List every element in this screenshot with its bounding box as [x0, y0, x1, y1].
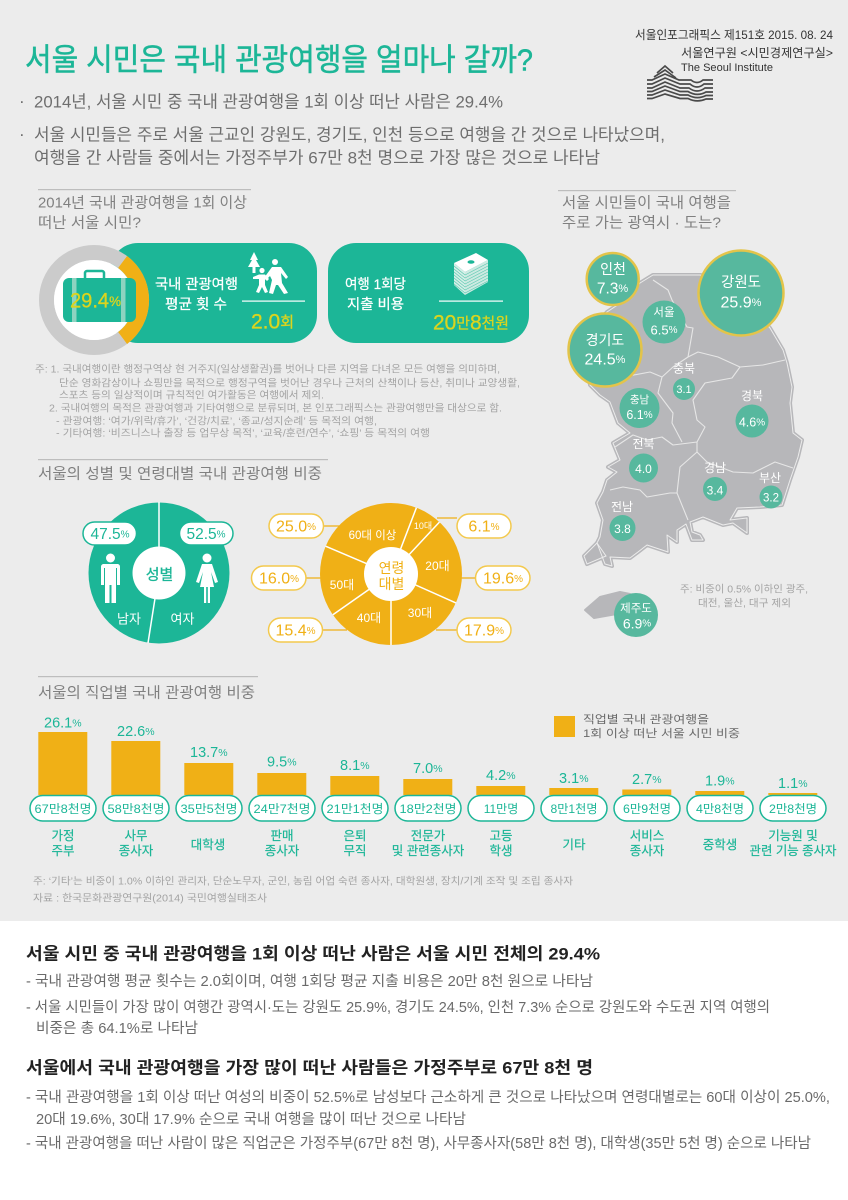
panel: average trips: 국내 관광여행	[155, 276, 238, 292]
callout: 20s share	[476, 566, 530, 590]
bar: middle school students	[687, 774, 753, 852]
conclusion two: 서울에서 국내 관광여행을 가장 많이 떠난 사람들은 가정주부로 67만 8천 명	[26, 1059, 593, 1078]
bar: middle school students: 중학생	[703, 838, 737, 852]
region: Gyeonggi	[568, 314, 642, 386]
region: Gyeongbuk: 4.6%	[739, 416, 765, 430]
chart: age pie: 60대 이상	[349, 529, 397, 542]
chart: gender pie	[83, 502, 233, 644]
icon: suitcase	[63, 271, 136, 322]
region: Gangwon: 강원도	[721, 274, 761, 291]
callout: 40s share: 15.4%	[275, 623, 316, 640]
title: 서울 시민은 국내 관광여행을 얼마나 갈까?	[25, 43, 533, 78]
bar: middle school students: 1.9%	[705, 774, 735, 790]
conclusion one: - 국내 관광여행 평균 횟수는 2.0회이며, 여행 1회당 평균 지출 비용은 20만 8천 원으로 나타남	[26, 973, 593, 990]
map note	[680, 583, 808, 610]
bar: office workers: 58만8천명	[108, 801, 164, 816]
bar: service workers: 서비스	[630, 829, 664, 843]
bar: professionals: 전문가	[411, 829, 446, 843]
bar: college students	[176, 745, 242, 852]
bar chart: occupation	[30, 716, 837, 858]
bar: skilled workers: 1.1%	[778, 776, 808, 792]
region: Chungnam: 충남	[630, 394, 649, 406]
callout: male share: 47.5%	[90, 526, 130, 543]
footnotes: - 기타여행: ‘비즈니스나 출장 등 업무상 목적’, ‘교육/훈련/연수’, ‘쇼핑’ 등 목적의 여행	[56, 427, 430, 440]
bar: professionals: 및 관련종사자	[392, 844, 465, 858]
chart: age pie: 연령	[379, 560, 404, 576]
panel: average trips: 2.0회	[251, 311, 294, 334]
region: Gyeongbuk	[736, 389, 768, 438]
bar: college students: 대학생	[191, 838, 225, 852]
bar: office workers: 사무	[124, 829, 148, 843]
conclusion one: - 서울 시민들이 가장 많이 여행간 광역시·도는 강원도 25.9%, 경기도 24.5%, 인천 7.3% 순으로 강원도와 수도권 지역 여행의	[26, 999, 770, 1016]
callout: 50s share	[252, 566, 306, 590]
panel: conclusions	[0, 921, 848, 1200]
legend	[554, 713, 740, 740]
region: Gyeonggi: 24.5%	[585, 352, 626, 369]
bar: retired	[322, 758, 388, 858]
panel: spend per trip	[328, 243, 529, 343]
icon: man	[101, 554, 120, 603]
bar: retired: 무직	[343, 844, 367, 858]
conclusion one: 서울 시민 중 국내 관광여행을 1회 이상 떠난 사람은 서울 시민 전체의 29.4%	[26, 945, 600, 964]
bar: skilled workers: 2만8천명	[769, 801, 817, 816]
heading: 2014 travellers: 2014년 국내 관광여행을 1회 이상	[38, 195, 247, 212]
bar: housewives	[30, 716, 96, 858]
heading: gender and age: 서울의 성별 및 연령대별 국내 관광여행 비중	[38, 466, 322, 483]
panel: spend per trip: 여행 1회당	[345, 276, 406, 292]
bar: office workers: 종사자	[119, 844, 154, 858]
bar: service workers: 6만9천명	[623, 801, 671, 816]
bar: sales workers: 종사자	[265, 844, 300, 858]
bar: professionals: 7.0%	[413, 761, 443, 777]
chart: age pie: 50대	[330, 578, 354, 592]
region: Busan	[759, 471, 782, 508]
bar: professionals	[392, 761, 465, 858]
bar: sales workers	[249, 755, 315, 858]
callout: 60s share	[269, 514, 324, 538]
chart: age pie: 대별	[379, 576, 404, 592]
footnotes: 2. 국내여행의 목적은 관광여행과 기타여행으로 분류되며, 본 인포그래픽스는 관광여행만을 대상으로 함.	[49, 403, 502, 415]
bar: retired: 21만1천명	[326, 801, 384, 816]
region: Jeonbuk: 4.0	[635, 462, 652, 476]
conclusion two	[26, 1059, 830, 1152]
region: Jeju	[614, 593, 658, 637]
region: Seoul	[642, 300, 686, 344]
chart notes and source	[33, 875, 573, 905]
bar: other: 3.1%	[559, 771, 589, 787]
bar: other: 기타	[562, 838, 586, 852]
footnotes: 스포츠 등의 일상적이며 규칙적인 여가활동은 여행에서 제외.	[59, 389, 324, 402]
bar: retired: 은퇴	[343, 829, 367, 843]
chart: age pie: 20대	[425, 559, 450, 573]
chart: gender pie: 남자	[117, 612, 141, 627]
summary bullets: ·	[19, 125, 25, 144]
summary bullets	[19, 92, 665, 168]
region: Gyeongnam: 경남	[704, 461, 726, 475]
region: Jeonnam: 3.8	[614, 522, 631, 536]
callout: 20s share: 19.6%	[483, 571, 523, 588]
heading: regions	[558, 190, 736, 232]
bar: high school students: 11만명	[484, 802, 518, 816]
callout: female share	[180, 522, 233, 545]
conclusion one	[26, 945, 770, 1037]
summary bullets: ·	[19, 92, 25, 111]
region: Incheon: 7.3%	[597, 281, 628, 298]
region: Seoul: 서울	[653, 306, 675, 319]
region: Jeju: 6.9%	[623, 616, 651, 632]
map: South Korea	[568, 250, 802, 637]
bar: high school students: 학생	[489, 844, 513, 858]
callout: 10s share	[457, 514, 511, 538]
bar: sales workers: 24만7천명	[254, 801, 310, 816]
callout: 30s share: 17.9%	[464, 623, 504, 640]
bar: skilled workers	[750, 776, 837, 858]
bar: office workers: 22.6%	[117, 724, 155, 740]
bar: retired: 8.1%	[340, 758, 370, 774]
bar: sales workers: 판매	[270, 829, 294, 843]
chart: age pie: 30대	[408, 606, 432, 620]
region: Jeonnam	[610, 500, 636, 541]
region: Jeonbuk: 전북	[632, 437, 655, 451]
bar: housewives: 주부	[51, 844, 75, 858]
legend: 1회 이상 떠난 서울 시민 비중	[583, 727, 740, 740]
bar: skilled workers: 기능원 및	[768, 829, 818, 843]
callout: 40s share	[268, 618, 322, 642]
publication info: 서울인포그래픽스 제151호 2015. 08. 24	[635, 28, 833, 42]
region: Busan: 부산	[759, 471, 781, 485]
region: Incheon: 인천	[600, 261, 626, 277]
footnotes	[35, 363, 520, 440]
region: Chungnam	[620, 388, 660, 428]
bar: high school students: 고등	[489, 829, 513, 843]
heading: occupation: 서울의 직업별 국내 관광여행 비중	[38, 685, 255, 702]
bar: college students: 35만5천명	[180, 801, 238, 816]
conclusion two: - 국내 관광여행을 1회 이상 떠난 여성의 비중이 52.5%로 남성보다 근소하게 큰 것으로 나타났으며 연령대별로는 60대 이상이 25.0%,	[26, 1089, 830, 1106]
legend: 직업별 국내 관광여행을	[583, 713, 709, 726]
chart: 29.4% donut with suitcase	[46, 252, 142, 348]
chart notes and source: 주: ‘기타’는 비중이 1.0% 이하인 관리자, 단순노무자, 군인, 농림 어업 숙련 종사자, 대학원생, 장치/기계 조작 및 조립 종사자	[33, 875, 573, 888]
map note: 대전, 울산, 대구 제외	[698, 598, 791, 610]
chart: age pie: 40대	[357, 611, 381, 625]
chart: age pie: 10대	[414, 521, 432, 531]
heading: regions: 서울 시민들이 국내 여행을	[562, 195, 731, 212]
region: Jeonnam: 전남	[611, 500, 633, 514]
heading: 2014 travellers	[38, 189, 251, 232]
region: Incheon	[587, 253, 639, 305]
summary bullets: 2014년, 서울 시민 중 국내 관광여행을 1회 이상 떠난 사람은 29.4%	[34, 93, 503, 112]
publication info: 서울연구원 <시민경제연구실>	[681, 46, 833, 60]
map note: 주: 비중이 0.5% 이하인 광주,	[680, 583, 808, 596]
callout: 50s share: 16.0%	[259, 571, 299, 588]
panel: spend per trip: 지출 비용	[347, 296, 404, 312]
panel: average trips: 평균 횟 수	[165, 296, 227, 312]
bar: other: 8만1천명	[550, 801, 598, 816]
bar: office workers	[103, 724, 169, 858]
region: Gyeonggi: 경기도	[586, 332, 624, 348]
bar: housewives: 가정	[51, 829, 75, 843]
heading: regions: 주로 가는 광역시 · 도는?	[562, 215, 721, 232]
bar: middle school students: 4만8천명	[696, 801, 744, 816]
bar: skilled workers: 관련 기능 종사자	[750, 844, 837, 858]
bar: service workers: 종사자	[630, 844, 665, 858]
region: Seoul: 6.5%	[651, 323, 678, 338]
publication info	[635, 28, 833, 74]
icon: stack of money	[454, 253, 488, 295]
conclusion one: 비중은 총 64.1%로 나타남	[36, 1020, 198, 1037]
bar: service workers: 2.7%	[632, 772, 662, 788]
summary bullets: 서울 시민들은 주로 서울 근교인 강원도, 경기도, 인천 등으로 여행을 간 것으로 나타났으며,	[34, 126, 665, 145]
region: Chungnam: 6.1%	[626, 408, 653, 422]
footnotes: 단순 영화감상이나 쇼핑만을 목적으로 행정구역을 벗어난 경우나 근처의 산책이나 등산, 취미나 교양생활,	[59, 377, 520, 390]
summary bullets: 여행을 간 사람들 중에서는 가정주부가 67만 8천 명으로 가장 많은 것으로 나타남	[34, 149, 600, 168]
region: Busan: 3.2	[763, 493, 779, 505]
icon: Seoul Institute logo	[647, 66, 713, 101]
chart: age pie	[252, 503, 530, 645]
bar: high school students	[468, 768, 534, 858]
bar: housewives: 67만8천명	[34, 801, 92, 816]
callout: female share: 52.5%	[186, 526, 226, 543]
conclusion two: 20대 19.6%, 30대 17.9% 순으로 국내 여행을 많이 떠난 것으로 나타남	[36, 1111, 466, 1128]
panel: spend per trip: 20만8천원	[433, 312, 509, 335]
bar: sales workers: 9.5%	[267, 755, 297, 771]
icon: woman	[196, 554, 218, 603]
icon: hikers and tree	[248, 252, 288, 294]
callout: male share	[83, 522, 136, 545]
region: Jeju: 제주도	[620, 602, 652, 615]
region: Gangwon: 25.9%	[721, 295, 762, 312]
region: Gyeongnam: 3.4	[707, 484, 724, 498]
chart: 29.4% donut with suitcase: 29.4%	[70, 290, 121, 313]
bar: housewives: 26.1%	[44, 716, 82, 732]
icon: Jeju island	[585, 592, 630, 618]
region: Chungbuk: 충북	[673, 362, 695, 376]
region: Gyeongbuk: 경북	[741, 389, 763, 403]
callout: 30s share	[457, 618, 511, 642]
chart: gender pie: 여자	[171, 612, 194, 627]
region: Gyeongnam	[703, 461, 727, 501]
callout: 60s share: 25.0%	[276, 519, 316, 536]
chart notes and source: 자료 : 한국문화관광연구원(2014) 국민여행실태조사	[33, 893, 267, 905]
footnotes: - 관광여행: ‘여가/위락/휴가’, ‘건강/치료’, ‘종교/성지순례’ 등 목적의 여행,	[56, 415, 377, 428]
region: Chungbuk	[673, 362, 695, 400]
bar: high school students: 4.2%	[486, 768, 516, 784]
chart: gender pie: 성별	[146, 567, 173, 584]
bar: service workers	[614, 772, 680, 858]
region: Jeonbuk	[629, 437, 658, 482]
region: Chungbuk: 3.1	[676, 384, 692, 396]
bar: professionals: 18만2천명	[400, 801, 456, 816]
region: Gangwon	[698, 250, 784, 336]
footnotes: 주: 1. 국내여행이란 행정구역상 현 거주지(일상생활권)를 벗어나 다른 지역을 다녀온 모든 여행을 의미하며,	[35, 363, 500, 376]
bar: college students: 13.7%	[190, 745, 228, 761]
conclusion two: - 국내 관광여행을 떠난 사람이 많은 직업군은 가정주부(67만 8천 명), 사무종사자(58만 8천 명), 대학생(35만 5천 명) 순으로 나타남	[26, 1135, 811, 1152]
bar: other	[541, 771, 607, 852]
callout: 10s share: 6.1%	[468, 519, 500, 536]
panel: average trips	[110, 243, 317, 343]
heading: 2014 travellers: 떠난 서울 시민?	[38, 215, 141, 232]
publication info: The Seoul Institute	[681, 62, 773, 74]
